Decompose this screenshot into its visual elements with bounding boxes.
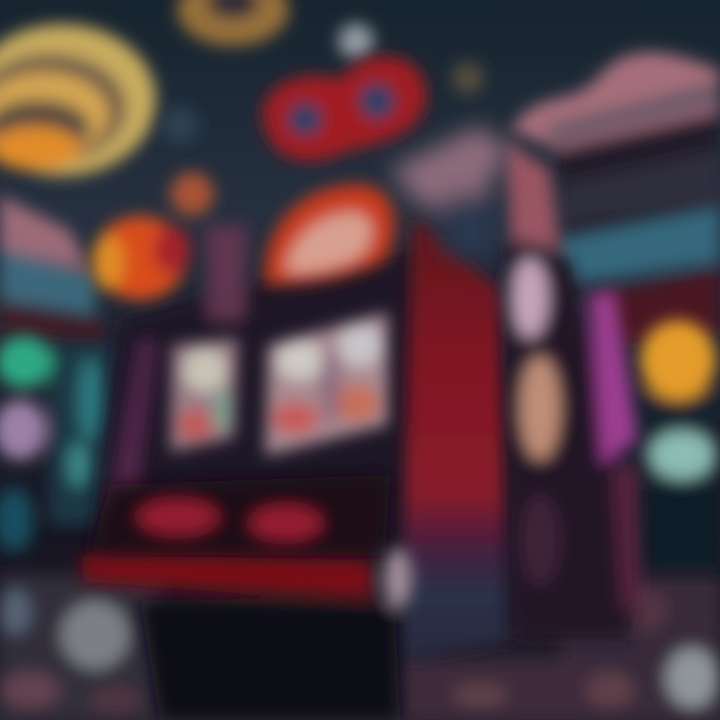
ceiling lamp: concentric disc (0, 24, 156, 176)
red side panel (400, 215, 512, 660)
right machine: orb and screen (625, 320, 720, 570)
machine base (80, 548, 412, 720)
right neighbouring machine (505, 140, 642, 640)
machine cabinet (90, 225, 440, 560)
left machine screens (0, 336, 115, 552)
orange balloons (92, 172, 214, 300)
floor (0, 575, 720, 720)
right reel window (265, 312, 388, 456)
dome light (265, 185, 395, 285)
small ceiling orbs (162, 23, 484, 143)
left wall structure (0, 195, 105, 345)
robot head topper (262, 56, 426, 161)
ceiling ring (177, 0, 289, 46)
upper machine roof (390, 125, 510, 255)
left reel window (170, 338, 238, 452)
right wall structure (510, 52, 720, 345)
red buttons panel (90, 475, 390, 555)
